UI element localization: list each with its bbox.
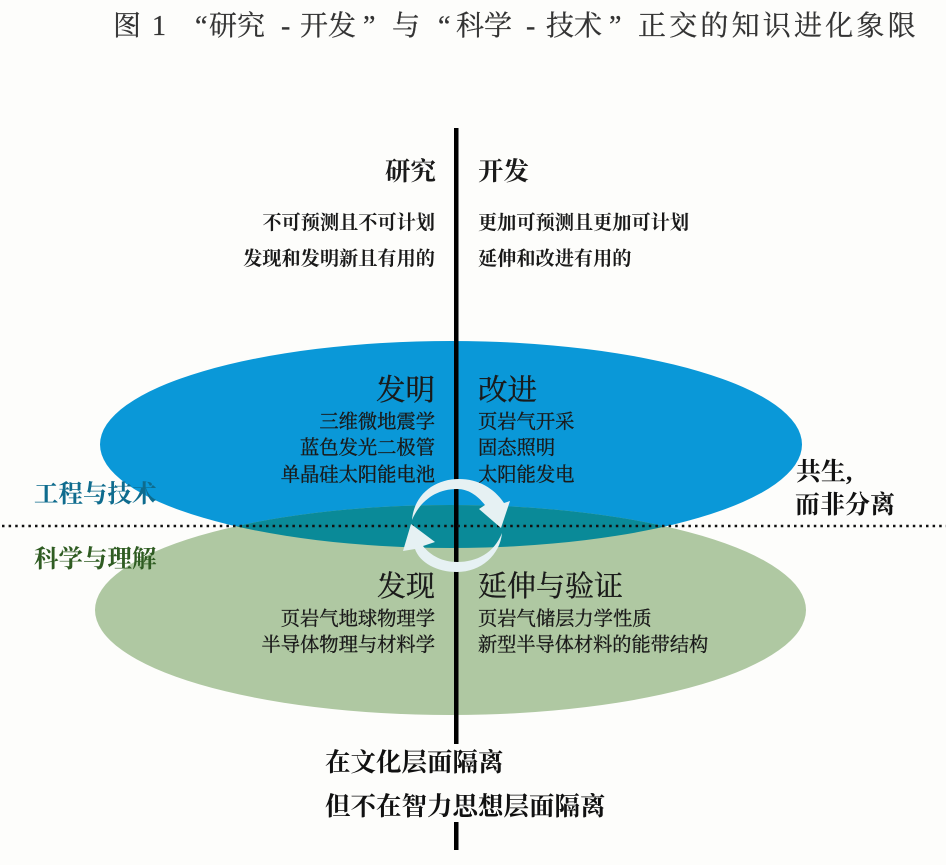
ellipse overlap: teal xyxy=(236,505,665,548)
title: 科学 xyxy=(456,10,512,42)
quadrant text: discovery: 半导体物理与材料学 xyxy=(261,634,435,656)
title: - xyxy=(281,11,290,42)
quadrant text: extension and validation: 新型半导体材料的能带结构 xyxy=(478,634,708,656)
quadrant text: improvement: 太阳能发电 xyxy=(478,464,574,486)
heading: research column: 发现和发明新且有用的 xyxy=(243,248,435,270)
heading: research column xyxy=(243,157,436,270)
ellipse: green science zone xyxy=(95,505,806,715)
quadrant text: improvement: 页岩气开采 xyxy=(478,411,574,433)
title: 开发 xyxy=(300,10,356,42)
quadrant text: extension and validation xyxy=(478,570,708,656)
quadrant text: invention: 单晶硅太阳能电池 xyxy=(281,464,435,486)
label: science and understanding: 科学与理解 xyxy=(34,545,157,573)
quadrant text: invention: 蓝色发光二极管 xyxy=(300,437,435,459)
vertical axis xyxy=(454,128,458,850)
quadrant text: extension and validation: 延伸与验证 xyxy=(478,570,623,603)
title: “ xyxy=(195,11,207,42)
heading: development column xyxy=(478,157,689,270)
quadrant text: improvement: 改进 xyxy=(478,374,537,407)
title: 1 xyxy=(152,11,166,42)
title: “ xyxy=(438,11,450,42)
heading: development column: 更加可预测且更加可计划 xyxy=(478,212,689,234)
quadrant text: invention xyxy=(281,374,435,486)
bottom note: 在文化层面隔离 xyxy=(325,748,504,777)
bottom note xyxy=(325,748,606,821)
callout: symbiosis: 共生, xyxy=(796,458,852,486)
quadrant text: invention: 发明 xyxy=(376,374,435,407)
heading: development column: 开发 xyxy=(478,157,529,186)
bottom note: 但不在智力思想层面隔离 xyxy=(325,792,606,821)
title: 与 xyxy=(392,10,420,42)
quadrant text: discovery: 页岩气地球物理学 xyxy=(281,608,435,630)
title: ” xyxy=(363,11,375,42)
heading: research column: 不可预测且不可计划 xyxy=(262,212,435,234)
title: ” xyxy=(609,11,621,42)
callout: symbiosis xyxy=(795,458,895,519)
title: 研究 xyxy=(209,10,265,42)
heading: research column: 研究 xyxy=(385,157,436,186)
quadrant text: improvement: 固态照明 xyxy=(478,437,555,459)
title: - xyxy=(526,11,535,42)
horizontal dotted divider xyxy=(2,525,946,527)
icon: circular arrows xyxy=(403,479,510,572)
label: engineering and technology: 工程与技术 xyxy=(34,480,157,508)
title: 正交的知识进化象限 xyxy=(638,10,919,42)
quadrant text: improvement xyxy=(478,374,574,486)
title: 技术 xyxy=(546,10,602,42)
callout: symbiosis: 而非分离 xyxy=(795,490,895,519)
title: 图 xyxy=(113,11,141,42)
quadrant text: invention: 三维微地震学 xyxy=(319,411,435,433)
quadrant text: extension and validation: 页岩气储层力学性质 xyxy=(478,608,652,630)
quadrant text: discovery xyxy=(261,570,435,656)
ellipse: blue technology zone xyxy=(100,341,802,548)
heading: development column: 延伸和改进有用的 xyxy=(478,248,632,270)
quadrant text: discovery: 发现 xyxy=(377,570,435,603)
